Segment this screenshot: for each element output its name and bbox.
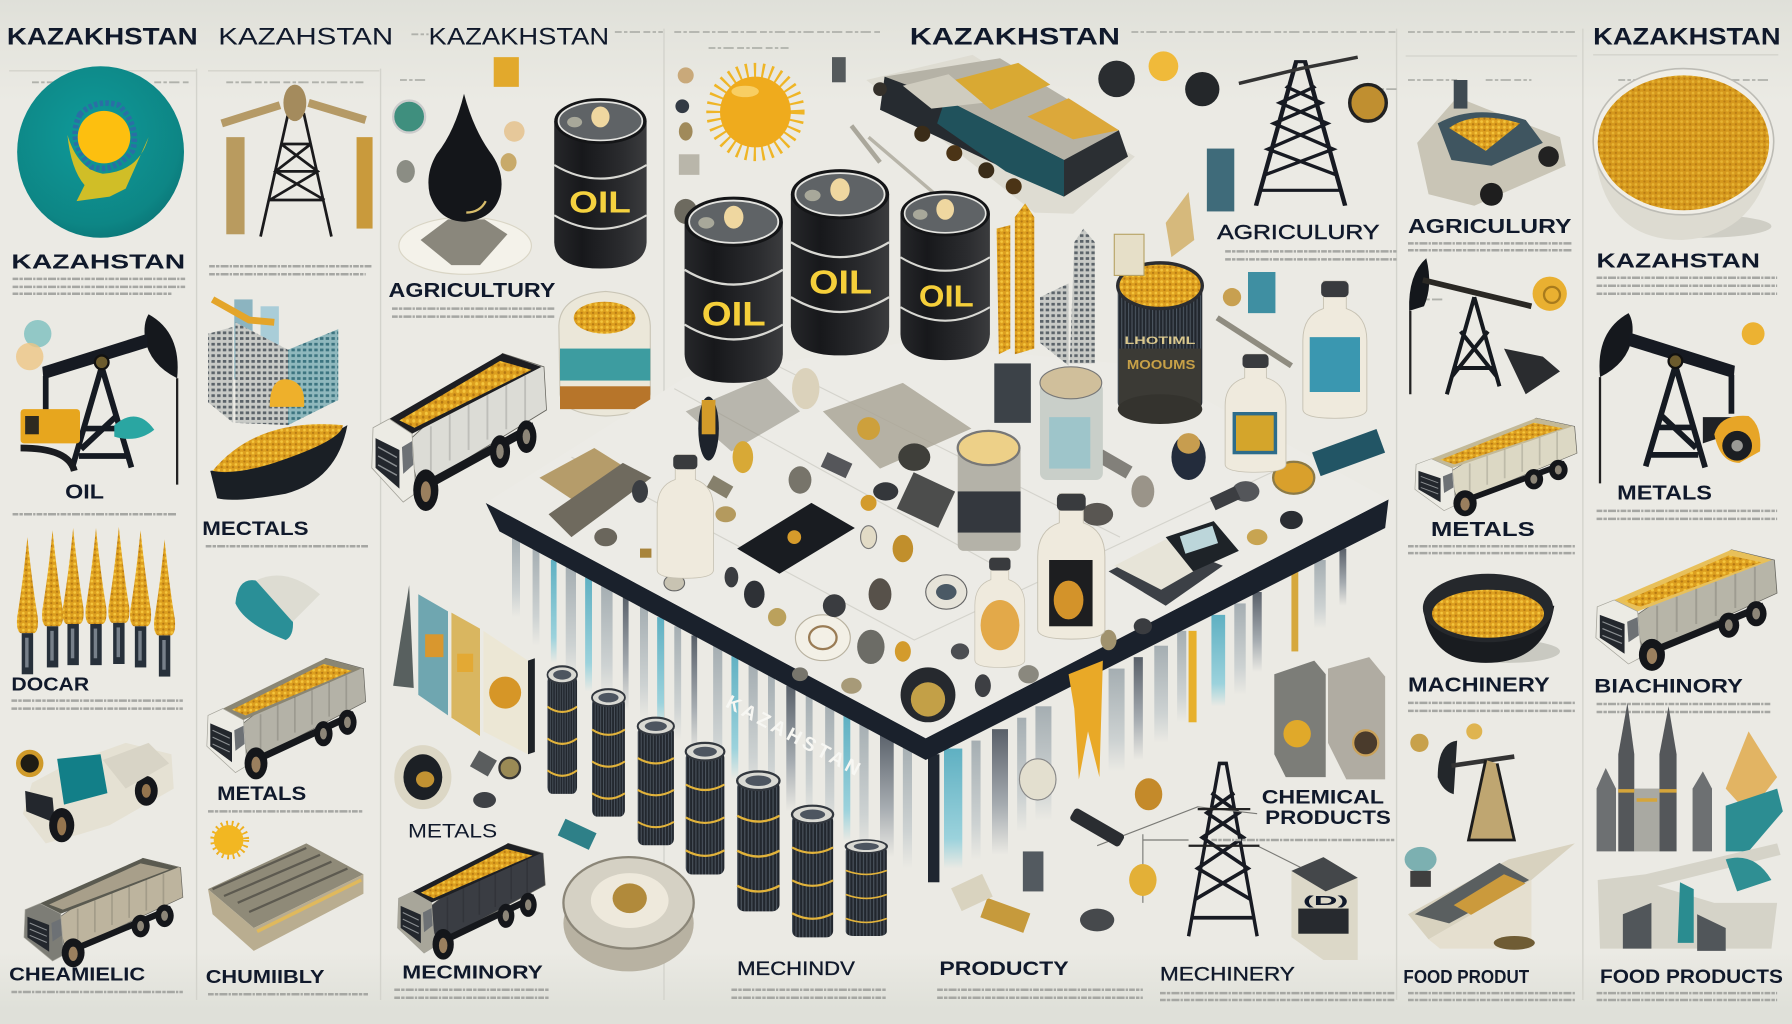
text: barrel OIL: OIL bbox=[919, 278, 974, 313]
icon: small pump bbox=[1410, 723, 1514, 840]
icon: small truck bbox=[1415, 418, 1577, 516]
heading: Kazahstan: KAZAHSTAN bbox=[218, 24, 393, 51]
icon: agri machine bbox=[1417, 80, 1566, 206]
icon: grain truck bbox=[1596, 550, 1777, 671]
icon: sun bbox=[714, 71, 797, 153]
label: Metals: METALS bbox=[408, 821, 497, 843]
bottle: amber bbox=[975, 558, 1025, 667]
icon: lattice tower bbox=[1256, 62, 1345, 206]
label: Agriculture: AGRICULTURY bbox=[389, 279, 556, 302]
bottles: right cluster bbox=[1217, 272, 1367, 472]
icon: oil drop bbox=[393, 57, 531, 274]
heading: Kazakhstan: KAZAKHSTAN bbox=[1593, 24, 1781, 51]
icon: conveyor machine bbox=[866, 55, 1135, 214]
bottle: white tall bbox=[657, 455, 713, 578]
icon: book machine bbox=[1408, 843, 1575, 950]
label: Achinory: BIACHINORY bbox=[1594, 676, 1743, 698]
label: Food Produt: FOOD PRODUT bbox=[1403, 966, 1529, 987]
text: barrel OIL: OIL bbox=[702, 296, 766, 334]
icon: skyline bbox=[208, 299, 338, 425]
label: Chemical Products bbox=[1262, 786, 1391, 829]
panel: right column B bbox=[1593, 24, 1783, 1000]
label: Machinery: MACHINERY bbox=[1408, 673, 1550, 696]
label: Mechindv: MECHINDV bbox=[737, 958, 855, 980]
label: Agriculury: AGRICULURY bbox=[1408, 215, 1572, 238]
text: barrel label: OIL bbox=[569, 185, 631, 220]
platform top bbox=[486, 343, 1389, 738]
decoration: platform corner post bbox=[928, 754, 939, 882]
text: drum label bbox=[1125, 335, 1195, 372]
label: Chumiibly: CHUMIIBLY bbox=[206, 966, 325, 987]
panel: column 3 bbox=[372, 24, 650, 998]
panel: machine stack columns bbox=[512, 537, 1346, 971]
text: drum label: MOOUMS bbox=[1127, 358, 1195, 372]
label: Metals: METALS bbox=[217, 783, 306, 805]
label: Chemical Products: CHEMICAL bbox=[1262, 786, 1384, 808]
panel: lower right centre bbox=[731, 657, 1394, 1000]
icon: teal kiosk bbox=[1726, 789, 1783, 851]
bottle: jug bbox=[1038, 494, 1105, 639]
icon: product box bbox=[1291, 857, 1358, 960]
icon: pumpjack bbox=[1599, 313, 1765, 483]
panel: column 2 bbox=[202, 24, 393, 994]
icon: small tower pack bbox=[1098, 51, 1386, 275]
platform items bbox=[539, 368, 1385, 722]
icon: dump truck bbox=[24, 858, 183, 967]
label: Metals: METALS bbox=[1617, 481, 1712, 504]
icon: lattice pumpjack bbox=[1409, 258, 1560, 394]
icon: tall corn and tower bbox=[994, 203, 1095, 423]
heading: Kazakhstan: KAZAKHSTAN bbox=[910, 24, 1120, 51]
text: drum label: LHOTIML bbox=[1125, 335, 1195, 347]
icon: roofed buildings bbox=[1598, 843, 1781, 951]
label: Producty: PRODUCTY bbox=[939, 958, 1069, 980]
panel: right column A bbox=[1403, 80, 1577, 1000]
label: Metals: METALS bbox=[1431, 518, 1535, 541]
icon: gold bowl bbox=[1593, 69, 1774, 240]
icon: large drum bbox=[1118, 263, 1202, 424]
icon: pylon bbox=[1097, 763, 1326, 936]
label: Mechinery: MECHINERY bbox=[1160, 964, 1295, 986]
small sketches left of sun bbox=[674, 57, 949, 224]
decoration: left hanging stripes bbox=[512, 537, 912, 869]
icon: twin towers bbox=[1597, 703, 1712, 851]
icon: derrick bbox=[222, 85, 373, 237]
icon: white truck bbox=[372, 353, 547, 511]
icon: catalog panels bbox=[393, 585, 535, 754]
panel: isometric platform bbox=[486, 343, 1389, 780]
icon: round machine bbox=[563, 857, 694, 971]
icon: gold fragment bbox=[1726, 731, 1777, 814]
text: barrel OIL: OIL bbox=[809, 265, 872, 302]
label: Agriculury: AGRICULURY bbox=[1217, 221, 1380, 244]
ribbon bbox=[1069, 661, 1103, 779]
label: Docar: DOCAR bbox=[11, 673, 89, 694]
label: Oil: OIL bbox=[65, 480, 104, 503]
panel: centre top bbox=[674, 24, 1397, 480]
icon: dark truck bbox=[397, 843, 545, 960]
small items bbox=[951, 759, 1162, 933]
icon: product boxes bbox=[1274, 657, 1385, 779]
icon: product pillars bbox=[547, 666, 887, 937]
label: Chemical Products: PRODUCTS bbox=[1265, 807, 1391, 829]
icon: centre barrels bbox=[685, 169, 990, 383]
small metal trinkets bbox=[470, 750, 597, 850]
faint lettering: KAZAHSTAN bbox=[722, 691, 864, 780]
icon: gold ring bbox=[1533, 277, 1567, 311]
icon: product box: (D) bbox=[1303, 894, 1349, 908]
label: Kazakhstan: KAZAHSTAN bbox=[11, 251, 185, 274]
label: Mectals: MECTALS bbox=[202, 518, 309, 540]
platform side band bbox=[486, 499, 1389, 760]
icon: grain boat bbox=[210, 424, 347, 500]
icon: jar bbox=[559, 291, 650, 416]
tower arm bbox=[1239, 57, 1358, 83]
icon: conveyor bed bbox=[208, 843, 363, 951]
icon: black bowl bbox=[1423, 574, 1560, 663]
heading: Kazakhstan: KAZAKHSTAN bbox=[7, 24, 198, 51]
icon: flag globe bbox=[17, 66, 184, 238]
icon: teal truck bbox=[18, 743, 174, 843]
label: Mecminory: MECMINORY bbox=[402, 961, 543, 982]
icon: small sun bbox=[214, 824, 246, 856]
icon: grain truck bbox=[207, 658, 366, 779]
icon: pumpjack bbox=[16, 314, 178, 485]
icon: corn row bbox=[17, 527, 175, 677]
label: Food Products: FOOD PRODUCTS bbox=[1600, 966, 1783, 988]
icon: can tower bbox=[1040, 367, 1103, 480]
icon: dome bbox=[1405, 847, 1437, 887]
icon: oil barrel bbox=[554, 98, 647, 269]
label: Cheamielic: CHEAMIELIC bbox=[9, 964, 145, 985]
panel: column 1 bbox=[7, 24, 198, 992]
icon: can bbox=[958, 431, 1021, 551]
icon: round lens bbox=[394, 745, 451, 809]
heading: Kazakhstan: KAZAKHSTAN bbox=[429, 24, 609, 51]
label: Kazahstan: KAZAHSTAN bbox=[1597, 249, 1760, 272]
decoration: right hanging stripes bbox=[944, 549, 1346, 869]
icon: teal capsule bbox=[235, 575, 320, 640]
